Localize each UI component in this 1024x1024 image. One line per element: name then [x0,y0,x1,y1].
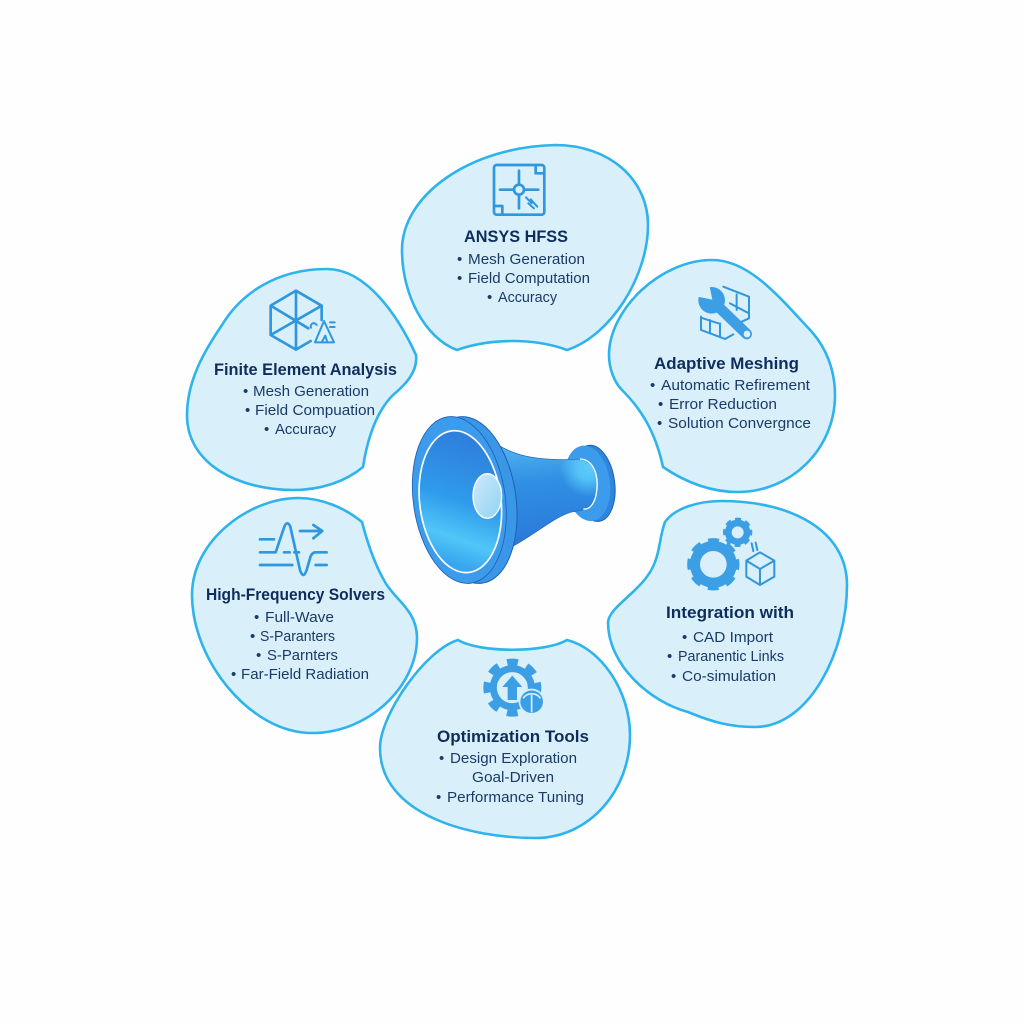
heading: Integration with: Integration with [666,603,794,622]
blob: High-Frequency Solvers [192,498,417,733]
list: Finite Element Analysis items: Accuracy [275,421,336,438]
list: High-Frequency items: S-Paranters [260,628,335,645]
heading: Adaptive Meshing: Adaptive Meshing [654,354,799,373]
list: Optimization items: Goal-Driven [472,769,554,786]
throat highlight [473,474,502,518]
list: Optimization items: Design Exploration [450,750,577,767]
list: Finite Element Analysis items: • [264,421,269,438]
icon: wrench and mesh [692,283,750,339]
horn body [498,445,597,546]
blob: Integration with [608,501,847,727]
list: Adaptive Meshing items: Solution Convergnce [668,415,811,432]
blob: Finite Element Analysis [187,269,416,490]
list: Integration items: • [682,629,687,646]
list: Adaptive Meshing items: • [658,396,663,413]
list: Integration items: • [667,648,672,665]
list: High-Frequency items [231,609,369,683]
list: High-Frequency items: • [256,647,261,664]
heading: Finite Element Analysis: Finite Element Analysis [214,360,397,379]
list: ANSYS HFSS items: Field Computation [468,270,590,287]
blob: ANSYS HFSS [402,145,648,350]
list: Finite Element Analysis items [243,383,375,438]
icon: gears and cube [690,519,774,588]
icon: central horn antenna [402,410,620,590]
list: Adaptive Meshing items: Automatic Refirement [661,377,811,394]
list: High-Frequency items: • [250,628,255,645]
list: Integration items: Paranentic Links [678,648,784,665]
list: ANSYS HFSS items: Mesh Generation [468,251,585,268]
list: Adaptive Meshing items: • [650,377,655,394]
list: Optimization items [436,750,584,806]
list: High-Frequency items: Far-Field Radiation [241,666,369,683]
list: High-Frequency items: Full-Wave [265,609,334,626]
list: Optimization items: Performance Tuning [447,789,584,806]
list: ANSYS HFSS items: • [487,289,492,306]
heading: Optimization Tools: Optimization Tools [437,727,589,746]
panel: Optimization Tools [380,640,630,838]
heading: High-Frequency Solvers: High-Frequency Solvers [206,585,385,604]
panel: Integration with [608,501,847,727]
list: Adaptive Meshing items [650,377,811,432]
list: Optimization items: • [439,750,444,767]
list: Integration items: CAD Import [693,629,774,646]
list: High-Frequency items: • [254,609,259,626]
list: ANSYS HFSS items: Accuracy [498,289,557,306]
panel: High-Frequency Solvers [192,498,417,733]
blob: Optimization Tools [380,640,630,838]
panel: ANSYS HFSS [402,145,648,350]
list: ANSYS HFSS items [457,251,590,306]
list: Finite Element Analysis items: Mesh Generation [253,383,369,400]
rear flange [560,442,620,524]
list: Finite Element Analysis items: • [245,402,250,419]
list: High-Frequency items: S-Parnters [267,647,338,664]
icon: wave signal [260,523,327,575]
list: ANSYS HFSS items: • [457,270,462,287]
list: Finite Element Analysis items: Field Compuation [255,402,375,419]
panel: Finite Element Analysis [187,269,416,490]
icon: mesh grid square [494,165,544,215]
blob: Adaptive Meshing [609,260,835,492]
mouth rim [402,410,527,590]
heading: ANSYS HFSS: ANSYS HFSS [464,227,568,246]
icon: optimization gear [487,662,545,715]
icon: hexagon mesh [271,291,335,350]
list: Adaptive Meshing items: Error Reduction [669,396,777,413]
list: ANSYS HFSS items: • [457,251,462,268]
list: Integration items [667,629,784,685]
list: Adaptive Meshing items: • [657,415,662,432]
list: High-Frequency items: • [231,666,236,683]
list: Finite Element Analysis items: • [243,383,248,400]
list: Optimization items: • [436,789,441,806]
list: Integration items: Co-simulation [682,668,776,685]
panel: Adaptive Meshing [609,260,835,492]
list: Integration items: • [671,668,676,685]
